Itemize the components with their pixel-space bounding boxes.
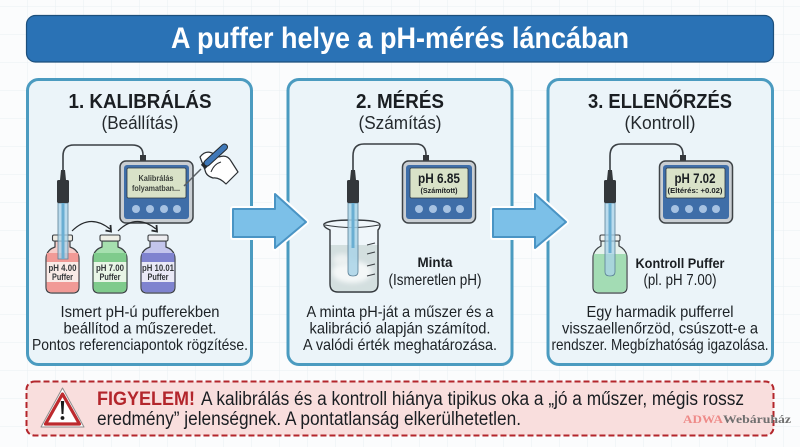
icon: control buffer bottle: [593, 235, 627, 293]
sample label: Minta: [418, 255, 453, 270]
bottle label: Puffer: [148, 272, 169, 282]
description text: kalibráció alapján számítod.: [310, 320, 490, 338]
panel: 1. kalibrálás: [28, 80, 252, 364]
arrow: first to second bottle: [72, 221, 111, 232]
icon: bottle pH 10.01: [141, 235, 175, 293]
arrow: kalibrálás to mérés: [233, 194, 306, 248]
probe cable: [63, 145, 143, 171]
panel: 3. ellenőrzés: [548, 80, 772, 364]
meter reading: [418, 171, 460, 195]
icon: bottle pH 7.00: [93, 235, 127, 293]
description text: beállítod a műszeredet.: [64, 320, 216, 338]
subheading: számítás: (Számítás): [358, 112, 442, 133]
warning text: [97, 389, 744, 430]
icon: probe head: [57, 170, 69, 203]
heading: kalibrálás: 1. KALIBRÁLÁS: [68, 90, 212, 113]
meter display text: Kalibrálás: [138, 173, 174, 183]
icon: bottle pH 4.00: [46, 203, 79, 293]
description text: Pontos referenciapontok rögzítése.: [32, 337, 248, 354]
subheading: beállítás: (Beállítás): [102, 112, 178, 133]
description text: [303, 304, 497, 354]
icon: hand with pen: [184, 147, 238, 186]
description text: A minta pH-ját a műszer és a: [306, 304, 494, 321]
watermark: ADWA: [683, 412, 723, 426]
warning text: A kalibrálás és a kontroll hiánya tipikus oka a „jó a műszer, mégis rossz: [201, 389, 744, 410]
control buffer label: (pl. pH 7.00): [644, 272, 716, 289]
subheading: kontroll: (Kontroll): [624, 112, 696, 133]
meter reading: [668, 171, 723, 195]
control buffer label: Kontroll Puffer: [636, 256, 725, 271]
watermark: Webáruház: [723, 412, 792, 426]
icon: electrode probe: [604, 170, 616, 276]
warning text: eredmény” jelenségnek. A pontatlanság elkerülhetetlen.: [97, 409, 521, 430]
title banner: [26, 16, 774, 62]
meter reading: (Számított): [420, 186, 458, 195]
arrow: mérés to ellenőrzés: [493, 194, 566, 248]
icon: electrode probe: [347, 170, 359, 276]
icon: meter: [120, 155, 193, 223]
heading: ellenőrzés: 3. ELLENŐRZÉS: [588, 90, 732, 113]
description text: visszaellenőrzöd, csúszott-e a: [562, 320, 758, 338]
bottle label: Puffer: [52, 272, 73, 282]
panel: 2. mérés: [288, 80, 512, 364]
meter reading: pH 6.85: [418, 171, 460, 186]
description text: [552, 304, 768, 354]
warning banner: [26, 382, 774, 436]
sample label: (Ismeretlen pH): [388, 272, 482, 289]
meter reading: (Eltérés: +0.02): [668, 186, 723, 195]
icon: meter: [402, 155, 476, 223]
heading: mérés: 2. MÉRÉS: [356, 90, 444, 113]
bottle label: pH 4.00: [48, 263, 76, 273]
description text: A valódi érték meghatározása.: [303, 337, 497, 354]
arrow: second to third bottle: [118, 221, 157, 232]
title: A puffer helye a pH-mérés láncában: [171, 22, 629, 55]
meter reading: pH 7.02: [674, 171, 716, 186]
control buffer label: [636, 256, 725, 289]
bottle label: pH 7.00: [96, 263, 124, 273]
sample label: [388, 255, 482, 289]
icon: beaker with sample: [324, 220, 380, 292]
description text: [32, 304, 248, 354]
bottle label: [142, 263, 174, 282]
description text: Ismert pH-ú pufferekben: [60, 304, 220, 321]
description text: Egy harmadik pufferrel: [586, 304, 734, 321]
description text: rendszer. Megbízhatóság igazolása.: [552, 337, 768, 354]
bottle label: [48, 263, 76, 282]
probe cable: [610, 144, 683, 171]
watermark: [683, 412, 792, 426]
meter display text: [132, 173, 180, 193]
warning text: FIGYELEM!: [97, 389, 195, 410]
icon: meter: [660, 155, 732, 223]
bottle label: Puffer: [100, 272, 121, 282]
icon: warning triangle: [41, 388, 84, 427]
bottle label: pH 10.01: [142, 263, 174, 273]
bottle label: [96, 263, 124, 282]
meter display text: folyamatban...: [132, 183, 180, 193]
probe tip in bottle: [58, 203, 68, 259]
probe cable: [353, 144, 426, 171]
